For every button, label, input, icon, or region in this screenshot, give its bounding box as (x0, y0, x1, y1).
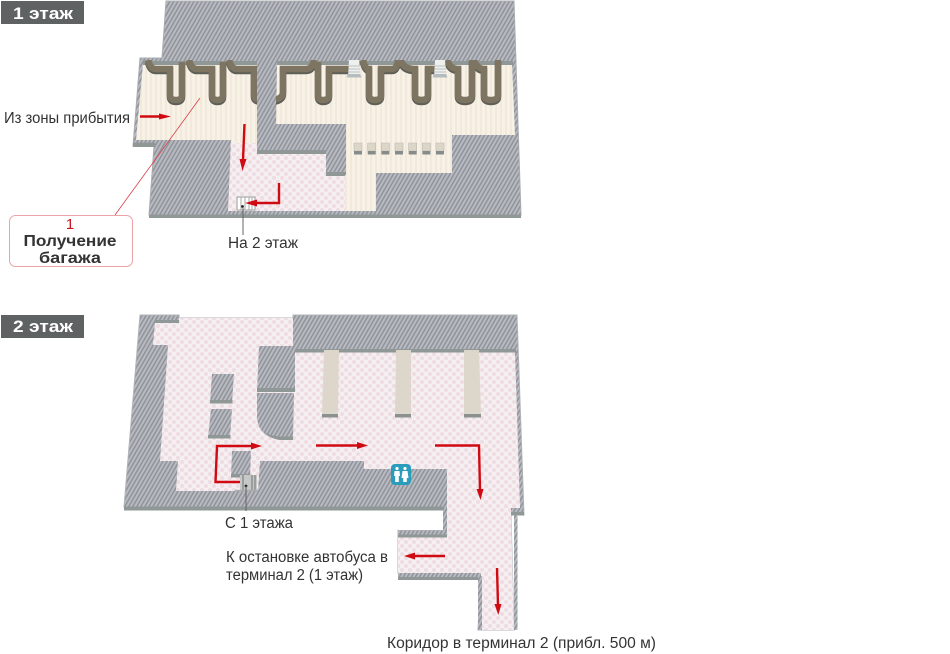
pink hall (228, 140, 346, 211)
text: from arrivals: Из зоны прибытия (4, 110, 130, 127)
arrow: to stairs (245, 183, 279, 206)
block B (208, 409, 232, 438)
top wall edges (143, 61, 513, 176)
block A (210, 374, 234, 403)
floor plan 1 (133, 1, 521, 218)
callout: baggage claim: багажа (39, 250, 101, 267)
lower wall strips (398, 508, 521, 630)
escalator 1 (346, 60, 362, 78)
arrow: turn down (435, 446, 484, 500)
bottom wall edge (149, 214, 521, 218)
block D (257, 393, 294, 440)
stairs from floor 1 (235, 475, 258, 490)
block C (257, 346, 295, 392)
leader: to floor 2 (242, 207, 244, 235)
text: to floor 2: На 2 этаж (228, 235, 299, 252)
pillar 3 (464, 350, 481, 418)
leader: baggage (115, 98, 200, 215)
cream left wing (136, 64, 257, 143)
arrow: from stairs to hall (216, 442, 262, 482)
stairs to floor 2 (237, 197, 255, 210)
label: floor 2: 2 этаж (13, 317, 74, 336)
text: to bus stop (226, 549, 388, 584)
pillar 2 (395, 350, 411, 418)
icon: restroom (391, 464, 411, 485)
arrow: to bus stop (404, 552, 445, 560)
callout: baggage claim: Получение (24, 233, 117, 250)
label: floor 2 (1, 315, 84, 338)
floor plan 2 (124, 315, 524, 630)
cream right hall (276, 64, 515, 211)
label: floor 1: 1 этаж (13, 4, 74, 23)
bottom wall edge (124, 506, 444, 510)
pillar 1 (322, 350, 339, 418)
wall shadows (155, 320, 524, 580)
arrow: along hall (316, 442, 368, 449)
arrow: down to stairs (240, 124, 246, 171)
building walls (124, 315, 524, 630)
pink floor (153, 318, 520, 630)
callout: baggage claim: 1 (66, 216, 74, 233)
callout: baggage claim (10, 216, 132, 267)
text: corridor: Коридор в терминал 2 (прибл. 500 м) (387, 635, 656, 652)
block E (231, 451, 251, 477)
counters (354, 143, 444, 154)
baggage carousels right (270, 60, 498, 102)
label: floor 1 (1, 1, 84, 24)
text: from floor 1: С 1 этажа (225, 515, 293, 532)
white gap (398, 510, 443, 530)
arrow: from arrivals (140, 114, 171, 120)
leader: from floor 1 (245, 486, 247, 511)
building walls (133, 1, 521, 215)
escalator 2 (432, 60, 448, 78)
text: to bus stop: К остановке автобуса в (226, 549, 388, 566)
arrow: to corridor (494, 568, 502, 615)
text: to bus stop: терминал 2 (1 этаж) (226, 567, 363, 584)
wing wall edge (133, 142, 155, 147)
baggage carousels left (148, 60, 262, 102)
